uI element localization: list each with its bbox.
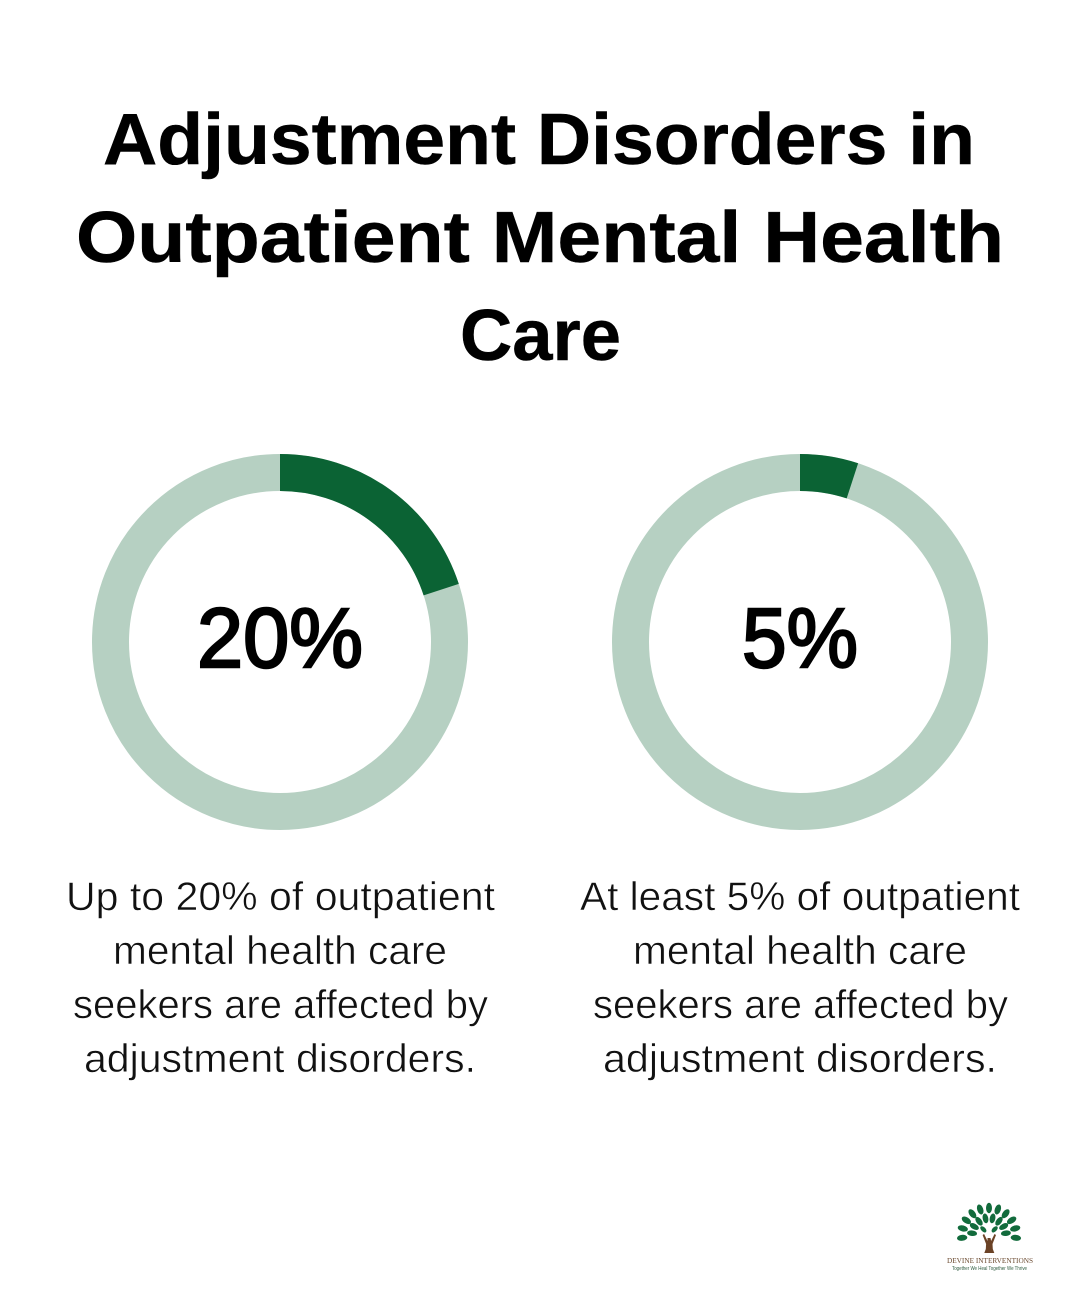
description: 20%: Up to 20% of outpatient <box>66 875 495 919</box>
donut chart: 20% <box>110 472 450 812</box>
icon: person trunk <box>983 1234 996 1253</box>
description: 5% <box>580 875 1020 1081</box>
icon: tree <box>957 1203 1021 1253</box>
description: 20%: mental health care <box>113 929 447 973</box>
value: 20%: 20% <box>197 591 363 685</box>
logo name: DEVINE INTERVENTIONS <box>947 1257 1033 1265</box>
donut chart: 5% <box>630 472 970 812</box>
description: 5%: adjustment disorders. <box>603 1037 997 1081</box>
description: 5%: seekers are affected by <box>593 983 1008 1027</box>
description: 20% <box>66 875 495 1081</box>
panel: 20% statistic <box>66 472 495 1081</box>
description: 20%: adjustment disorders. <box>84 1037 476 1081</box>
title <box>76 100 1004 376</box>
description: 5%: mental health care <box>633 929 967 973</box>
logo tagline: Together We Heal Together We Thrive <box>952 1266 1027 1272</box>
description: 5%: At least 5% of outpatient <box>580 875 1020 919</box>
panel: 5% statistic <box>580 472 1020 1081</box>
title: Care <box>460 296 621 376</box>
value: 5%: 5% <box>742 591 858 685</box>
title: Outpatient Mental Health <box>76 198 1004 278</box>
description: 20%: seekers are affected by <box>73 983 488 1027</box>
title: Adjustment Disorders in <box>103 100 975 180</box>
logo: Devine Interventions <box>947 1203 1033 1272</box>
